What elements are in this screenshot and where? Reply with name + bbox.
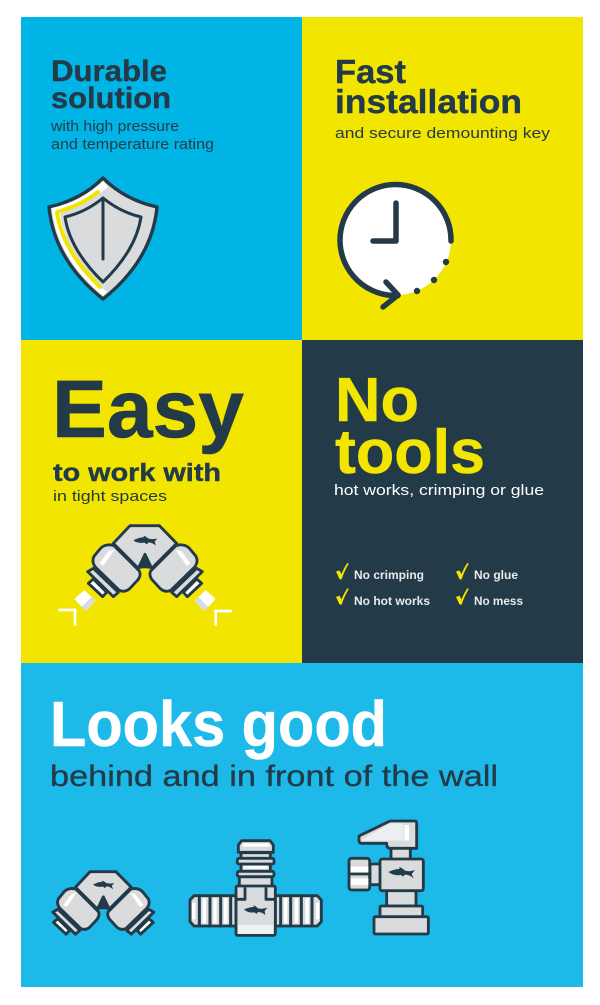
subheading: to work with: to work with <box>53 459 221 487</box>
panel: no tools <box>302 340 583 663</box>
checklist: No crimping <box>354 570 424 582</box>
text: in tight spaces: in tight spaces <box>53 488 167 505</box>
heading: durable solution: Durable <box>51 55 167 88</box>
heading: no tools: No <box>335 366 419 435</box>
heading: no tools <box>335 366 485 487</box>
text: pressure and temperature rating <box>50 119 214 153</box>
heading: looks good: Looks good <box>50 688 387 760</box>
icon: elbow fitting with corner marks <box>58 526 232 626</box>
checklist: No glue <box>474 570 518 582</box>
panel: looks good <box>21 663 583 987</box>
text: pressure and temperature rating: and temperature rating <box>51 137 214 153</box>
icon: shield <box>49 178 157 299</box>
icon: tee fitting <box>190 841 321 935</box>
panel: fast installation <box>302 17 583 340</box>
text: pressure and temperature rating: with high pressure <box>50 119 179 135</box>
panel: easy to work with <box>21 340 302 663</box>
heading: fast installation: installation <box>335 83 522 120</box>
heading: easy: Easy <box>52 364 244 455</box>
text: secure demounting key: and secure demounting key <box>335 125 551 142</box>
text: hot works, crimping or glue: hot works, crimping or glue <box>334 482 544 499</box>
checklist: No mess <box>474 596 523 608</box>
heading: no tools: tools <box>335 418 485 487</box>
heading: fast installation <box>335 53 522 120</box>
heading: durable solution <box>51 55 171 115</box>
icon: clock <box>340 185 451 307</box>
icon: angle valve <box>349 821 428 934</box>
heading: durable solution: solution <box>51 82 171 115</box>
checklist <box>336 563 523 608</box>
icon: elbow fitting <box>53 872 154 934</box>
heading: fast installation: Fast <box>335 53 406 90</box>
checklist: No hot works <box>354 596 430 608</box>
panel: durable solution <box>21 17 302 340</box>
subheading: behind and in front of the wall: behind and in front of the wall <box>50 760 498 793</box>
